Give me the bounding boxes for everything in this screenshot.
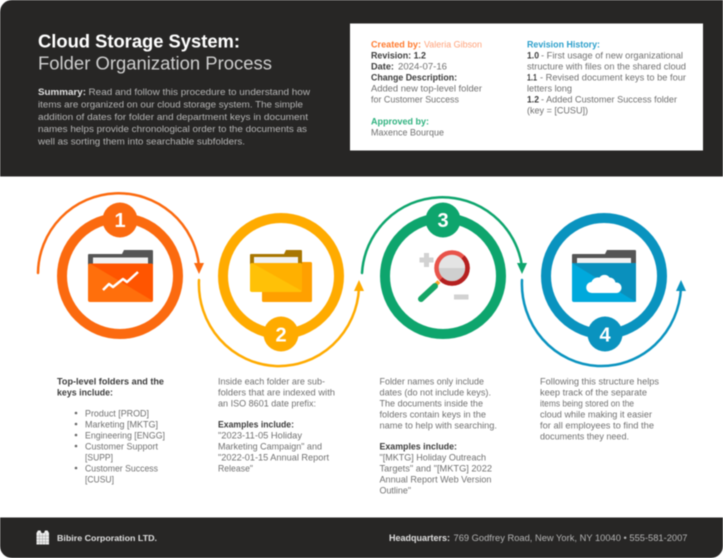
step 1: orange ring with arrow [38, 193, 204, 334]
step 2 text: Marketing Campaign" and [218, 442, 322, 452]
document details column: Revision: 1.2 [371, 50, 426, 60]
document details column: Approved by: [371, 116, 429, 126]
step 3 text: name to help with searching. [380, 420, 497, 430]
step 4 text: keep track of the separate [540, 388, 647, 398]
icon: orange folder with chart line [88, 250, 153, 302]
summary text: well as sorting them into searchable subfolders. [37, 136, 245, 146]
step 2 text: folders that are indexed with [218, 388, 335, 398]
revision history column: letters long [527, 84, 572, 94]
step 2 text: Release" [218, 464, 253, 474]
step 2: yellow ring with arrow: 2 [275, 324, 287, 346]
step 4 text: Following this structure helps [540, 376, 660, 386]
revision history column: (key = [CUSU]) [527, 106, 588, 116]
summary text [37, 87, 311, 146]
summary text: names helps provide chronological order to the documents as [38, 124, 308, 134]
document details column: Added new top-level folder [371, 84, 482, 94]
step 4 text: documents they need. [540, 432, 629, 442]
step 3 text [380, 376, 497, 496]
revision history column: 1.0 [527, 50, 539, 60]
title [38, 32, 272, 74]
revision history column [527, 40, 686, 116]
revision history column: structure with files on the shared cloud [527, 62, 686, 72]
step 1 text: Product [PROD] [85, 408, 149, 418]
revision history column: 1.1 [527, 72, 537, 82]
header panel [0, 0, 723, 176]
document details column: Maxence Bourque [371, 128, 444, 138]
step 3: green ring with arrow [362, 197, 527, 334]
step 4: blue ring with arrow [522, 218, 686, 366]
revision history column: - Revised document keys to be four [540, 72, 686, 82]
step 3 text: Outline" [380, 486, 411, 496]
revision history column: - Added Customer Success folder [541, 94, 677, 104]
step 1 text: keys include: [57, 388, 113, 398]
company name: Bibire Corporation LTD. [57, 533, 157, 543]
icon: building [36, 530, 49, 544]
step 1: orange ring with arrow: 1 [114, 210, 126, 232]
step 2: yellow ring with arrow [199, 218, 364, 366]
step 1 text [57, 376, 165, 484]
step 3 text: folders contain keys in the [380, 410, 486, 420]
step 4 text [540, 376, 660, 442]
step 3: green ring with arrow: 3 [437, 210, 449, 232]
icon: yellow stacked folders [250, 250, 312, 302]
step 3 text: Examples include: [380, 442, 457, 452]
headquarters address: Headquarters: [389, 533, 450, 543]
headquarters address: 769 Godfrey Road, New York, NY 10040 • 555-581-2007 [454, 533, 688, 543]
document details column: Date: [371, 62, 394, 72]
footer panel [0, 518, 723, 558]
step 2 text [218, 376, 335, 474]
step 3 text: Targets" and "[MKTG] 2022 [380, 464, 492, 474]
icon: magnifying glass with plus and minus [420, 252, 468, 300]
step 2 text: Examples include: [218, 420, 294, 430]
step 2 text: "2023-11-05 Holiday [218, 430, 303, 440]
title: Folder Organization Process [38, 54, 272, 74]
step 2 text: Inside each folder are sub- [218, 376, 325, 386]
step 1 text: Top-level folders and the [57, 376, 164, 386]
summary text: items are organized on our cloud storage system. The simple [38, 100, 303, 110]
icon: blue folder with cloud [572, 250, 636, 302]
step 2 text: an ISO 8601 date prefix: [218, 398, 316, 408]
document details column: Change Description: [371, 72, 457, 82]
step 4 text: items being stored on the [540, 398, 634, 408]
step 3 text: "[MKTG] Holiday Outreach [380, 452, 486, 462]
step 1 text: [SUPP] [85, 452, 113, 462]
revision history column: - First usage of new organizational [541, 50, 683, 60]
step 3 text: The documents inside the [380, 398, 483, 408]
title: Cloud Storage System: [38, 32, 240, 52]
document details column [371, 40, 482, 138]
step 3 text: Folder names only include [380, 376, 484, 386]
revision history column: Revision History: [527, 40, 600, 50]
step 1 text: Engineering [ENGG] [85, 430, 165, 440]
summary text: Summary: [38, 87, 86, 97]
step 4 text: cloud while making it easier [540, 410, 652, 420]
document info card [350, 24, 703, 150]
step 1 text: Marketing [MKTG] [85, 420, 158, 430]
document details column: Valeria Gibson [424, 40, 482, 50]
step 1 text: Customer Success [85, 464, 159, 474]
document details column: Created by: [371, 40, 421, 50]
document details column: 2024-07-16 [398, 62, 447, 72]
document details column: for Customer Success [371, 94, 460, 104]
summary text: Read and follow this procedure to understand how [88, 87, 311, 97]
step 1 text: Customer Support [85, 442, 159, 452]
step 1 text: [CUSU] [85, 474, 114, 484]
summary text: addition of dates for folder and department keys in document [38, 112, 309, 122]
step 3 text: Annual Report Web Version [380, 474, 492, 484]
revision history column: 1.2 [527, 94, 539, 104]
step 3 text: dates (do not include keys). [380, 388, 491, 398]
step 2 text: "2022-01-15 Annual Report [218, 452, 330, 462]
step 4: blue ring with arrow: 4 [599, 324, 611, 346]
step 4 text: for all employees to find the [540, 420, 654, 430]
